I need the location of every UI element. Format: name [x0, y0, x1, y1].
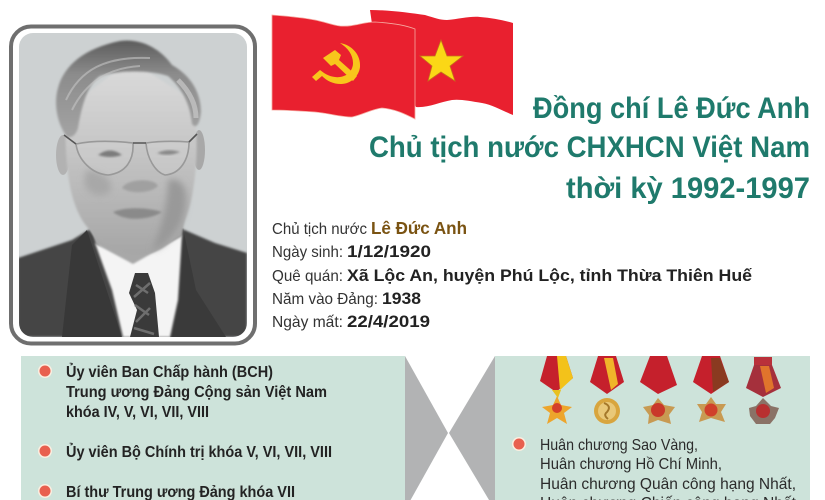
- suit: [18, 228, 247, 337]
- nose and mouth shadows: [122, 180, 158, 192]
- medal 2: [590, 356, 624, 424]
- ears: [56, 135, 68, 175]
- panel: awards: [495, 356, 810, 500]
- biography text block: Chủ tịch nước: [272, 221, 367, 238]
- hair: [56, 40, 201, 137]
- awards text: Huân chương Quân công hạng Nhất,: [540, 476, 796, 493]
- medal 1: [540, 356, 573, 424]
- bullet 1: [38, 364, 52, 378]
- biography text block: [272, 218, 753, 331]
- portrait photo frame: [11, 26, 255, 344]
- eyes: [98, 150, 122, 157]
- medal 4: [693, 356, 729, 422]
- biography text block: Quê quán:: [272, 268, 343, 285]
- icon: hammer and sickle: [312, 43, 360, 84]
- bullet: [512, 437, 526, 451]
- biography text block: Ngày mất:: [272, 314, 343, 331]
- title: [369, 92, 810, 205]
- bullet 2: [38, 444, 52, 458]
- face: [66, 60, 197, 254]
- shirt: [95, 235, 182, 337]
- positions text: [66, 362, 332, 500]
- biography text block: 22/4/2019: [347, 312, 430, 331]
- positions text: Trung ương Đảng Cộng sản Việt Nam: [66, 384, 327, 401]
- connector: gray triangles: [405, 356, 495, 500]
- positions text: Ủy viên Bộ Chính trị khóa V, VI, VII, VIII: [66, 442, 332, 461]
- panel: positions: [21, 356, 405, 500]
- biography text block: Ngày sinh:: [272, 244, 343, 261]
- glasses: [64, 134, 197, 175]
- awards text: Huân chương Sao Vàng,: [540, 437, 698, 454]
- flag: Party: [272, 15, 415, 119]
- biography text block: Xã Lộc An, huyện Phú Lộc, tỉnh Thừa Thiên Huế: [347, 266, 753, 285]
- icon: yellow star: [420, 40, 463, 81]
- positions text: khóa IV, V, VI, VII, VIII: [66, 404, 209, 421]
- bullet 3: [38, 484, 52, 498]
- neck: [92, 222, 184, 265]
- biography text block: 1/12/1920: [347, 242, 431, 261]
- portrait photo: [18, 33, 247, 337]
- awards text: Huân chương Hồ Chí Minh,: [540, 456, 722, 473]
- flags: [272, 10, 513, 119]
- tie: [129, 273, 159, 337]
- awards text: [540, 437, 797, 500]
- medal 3: [640, 356, 677, 424]
- positions text: Ủy viên Ban Chấp hành (BCH): [66, 362, 273, 381]
- medal 5: [746, 357, 781, 424]
- title: thời kỳ 1992-1997: [566, 172, 810, 205]
- biography text block: 1938: [382, 289, 421, 308]
- biography text block: Lê Đức Anh: [371, 218, 467, 238]
- biography text block: Năm vào Đảng:: [272, 291, 378, 308]
- flag: Vietnam: [370, 10, 513, 115]
